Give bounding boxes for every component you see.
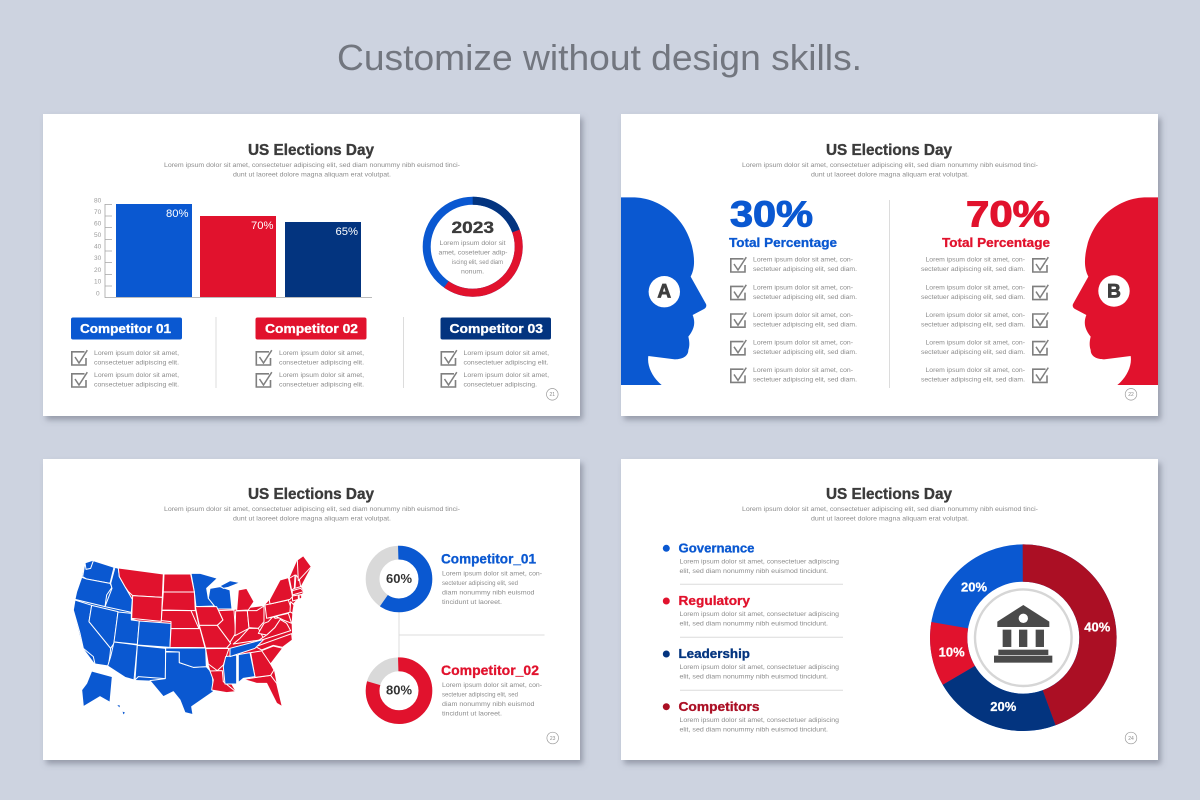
page number 24 [1125, 732, 1137, 744]
text: competitor 01: Lorem ipsum dolor sit amet, con- [442, 571, 542, 578]
competitor 02: Lorem ipsum dolor sit amet, [279, 372, 364, 379]
bar chart: 80 [94, 198, 102, 204]
list item: regulatory: Regulatory [678, 593, 751, 608]
page number 23: 23 [550, 736, 556, 742]
bar chart: 70 [94, 209, 102, 216]
competitor 01: consectetuer adipiscing elit. [94, 382, 179, 388]
checklist: left: sectetuer adipiscing elit, sed diam. [753, 321, 857, 328]
intro text: Lorem ipsum dolor sit amet, consectetuer adipiscing elit, sed diam nonummy nibh euismod tinci- [742, 162, 1038, 169]
checklist: left: Lorem ipsum dolor sit amet, con- [753, 284, 853, 291]
competitor 02: consectetuer adipiscing elit. [279, 382, 364, 388]
checklist: right: sectetuer adipiscing elit, sed diam. [921, 266, 1025, 273]
text: competitor 02 [441, 662, 542, 718]
text: competitor 02: sectetuer adipiscing elit, sed [442, 692, 518, 699]
title: US Elections Day [826, 486, 952, 503]
text: competitor 01: Competitor_01 [441, 550, 536, 566]
checklist: right: Lorem ipsum dolor sit amet, con- [926, 367, 1025, 374]
panel: head comparison slide [621, 114, 1158, 416]
checklist: right [921, 257, 1048, 384]
competitor 02: consectetuer adipiscing elit. [279, 360, 364, 366]
bar chart: 80% [166, 208, 189, 220]
page number 24: 24 [1128, 736, 1134, 742]
list item: regulatory: elit, sed diam nonummy nibh euismod tincidunt. [680, 620, 828, 628]
checklist: left: sectetuer adipiscing elit, sed diam. [753, 377, 857, 384]
checklist: left: sectetuer adipiscing elit, sed diam. [753, 266, 857, 273]
donut: 2023: 2023 [452, 218, 494, 237]
checklist: right: Lorem ipsum dolor sit amet, con- [926, 312, 1025, 319]
list item: leadership [663, 646, 839, 680]
list item: regulatory: Lorem ipsum dolor sit amet, consectetuer adipiscing [680, 611, 839, 618]
panel: bar chart slide [43, 114, 580, 416]
text: competitor 02: tincidunt ut laoreet. [442, 711, 502, 718]
stat: 30% [729, 194, 837, 250]
checklist: left: Lorem ipsum dolor sit amet, con- [753, 340, 853, 347]
text: competitor 02: Competitor_02 [441, 662, 539, 678]
donut chart: 20% [961, 580, 987, 595]
donut: competitor 02 80%: 80% [386, 684, 412, 698]
text: competitor 02: Lorem ipsum dolor sit amet, con- [442, 682, 542, 689]
text: competitor 01: sectetuer adipiscing elit, sed [442, 580, 518, 587]
stat: 70% [942, 194, 1050, 250]
competitor 01: Lorem ipsum dolor sit amet, [94, 372, 179, 379]
icon: blue head A: A [657, 282, 671, 302]
competitor 03 [440, 318, 551, 388]
competitor 01: consectetuer adipiscing elit. [94, 360, 179, 366]
title: US Elections Day [248, 142, 374, 159]
title: US Elections Day [248, 486, 374, 503]
checklist: right: sectetuer adipiscing elit, sed diam. [921, 377, 1025, 384]
list item: leadership: Lorem ipsum dolor sit amet, consectetuer adipiscing [680, 664, 839, 671]
text: competitor 02: diam nonummy nibh euismod [442, 701, 535, 708]
competitor 03: consectetuer adipiscing. [464, 382, 537, 388]
checklist: left: Lorem ipsum dolor sit amet, con- [753, 312, 853, 319]
intro text: Lorem ipsum dolor sit amet, consectetuer adipiscing elit, sed diam nonummy nibh euismod tinci- [164, 162, 460, 169]
bar chart: 20 [94, 267, 102, 274]
checklist: right: sectetuer adipiscing elit, sed diam. [921, 321, 1025, 328]
list item: regulatory [663, 593, 839, 628]
competitor 03: Lorem ipsum dolor sit amet, [464, 372, 549, 379]
competitor 02: Competitor 02 [265, 321, 358, 336]
text: competitor 01 [441, 550, 542, 606]
donut: 2023: nonum. [461, 268, 484, 276]
donut chart: 20% [990, 699, 1017, 714]
page number 23 [547, 732, 558, 744]
page number 22: 22 [1128, 392, 1134, 398]
list item: competitors [663, 699, 839, 734]
intro text [164, 162, 460, 178]
checklist: left: Lorem ipsum dolor sit amet, con- [753, 257, 853, 264]
donut: 2023: Lorem ipsum dolor sit [440, 240, 506, 247]
competitor 02 [256, 318, 366, 388]
intro text [164, 506, 460, 522]
list item: governance [663, 540, 839, 575]
title: US Elections Day [826, 142, 952, 159]
bar chart: 10 [94, 278, 102, 286]
list item: governance: Lorem ipsum dolor sit amet, consectetuer adipiscing [680, 558, 839, 565]
donut chart [939, 563, 1111, 714]
bar chart [94, 198, 372, 298]
list item: governance: elit, sed diam nonummy nibh euismod tincidunt. [680, 568, 828, 575]
main heading: Customize without design skills. [337, 37, 862, 78]
list item: competitors: elit, sed diam nonummy nibh euismod tincidunt. [680, 726, 828, 734]
icon: government building [994, 605, 1052, 663]
competitor 01: Lorem ipsum dolor sit amet, [94, 350, 179, 357]
donut: competitor 01 60%: 60% [386, 572, 412, 586]
bar chart: 30 [94, 255, 102, 262]
checklist: left: Lorem ipsum dolor sit amet, con- [753, 367, 853, 374]
stat: 70%: 70% [966, 194, 1050, 235]
checklist: right: Lorem ipsum dolor sit amet, con- [926, 257, 1025, 264]
panel: map slide [43, 459, 580, 760]
list item: competitors: Lorem ipsum dolor sit amet, consectetuer adipiscing [680, 717, 839, 724]
checklist: left: sectetuer adipiscing elit, sed diam. [753, 349, 857, 356]
donut: 2023: amet, cosetetuer adip- [438, 250, 508, 256]
bar chart: 40 [94, 244, 102, 250]
text: competitor 01: tincidunt ut laoreet. [442, 599, 502, 606]
stat: 70%: Total Percentage [942, 235, 1050, 250]
donut: competitor 02 80% [373, 664, 425, 717]
competitor 03: Competitor 03 [450, 321, 543, 336]
list item: competitors: Competitors [678, 699, 760, 714]
bar chart: 70% [251, 220, 274, 232]
page number 21: 21 [550, 392, 555, 398]
page number 22 [1125, 388, 1137, 400]
donut: 2023: iscing elit, sed diam [452, 259, 503, 266]
stat: 30%: 30% [730, 194, 813, 235]
icon: red head B: B [1107, 281, 1121, 302]
bar chart: 0 [96, 290, 100, 298]
intro text: dunt ut laoreet dolore magna aliquam erat volutpat. [233, 172, 391, 178]
competitor 03: Lorem ipsum dolor sit amet, [464, 350, 549, 357]
icon: blue head A [621, 197, 706, 385]
donut chart: 10% [939, 644, 965, 659]
intro text: Lorem ipsum dolor sit amet, consectetuer adipiscing elit, sed diam nonummy nibh euismod tinci- [164, 506, 460, 513]
competitor 03: consectetuer adipiscing elit. [464, 360, 549, 366]
bar chart: 60 [94, 220, 102, 228]
donut: 2023 [427, 201, 519, 293]
list item: leadership: Leadership [678, 646, 750, 661]
intro text [742, 506, 1038, 522]
checklist: left [731, 257, 857, 384]
competitor 01: Competitor 01 [80, 321, 171, 336]
checklist: right: sectetuer adipiscing elit, sed diam. [921, 294, 1025, 301]
icon: red head B [1073, 197, 1158, 385]
competitor 02: Lorem ipsum dolor sit amet, [279, 350, 364, 357]
list item: governance: Governance [678, 540, 754, 555]
US map [73, 556, 311, 715]
intro text [742, 162, 1038, 178]
intro text: Lorem ipsum dolor sit amet, consectetuer adipiscing elit, sed diam nonummy nibh euismod tinci- [742, 506, 1038, 513]
bar chart: 50 [94, 232, 102, 239]
donut: competitor 01 60% [373, 553, 425, 605]
checklist: right: Lorem ipsum dolor sit amet, con- [926, 340, 1025, 347]
intro text: dunt ut laoreet dolore magna aliquam erat volutpat. [233, 516, 391, 522]
checklist: right: sectetuer adipiscing elit, sed diam. [921, 349, 1025, 356]
checklist: left: sectetuer adipiscing elit, sed diam. [753, 294, 857, 301]
checklist: right: Lorem ipsum dolor sit amet, con- [926, 284, 1025, 291]
intro text: dunt ut laoreet dolore magna aliquam erat volutpat. [811, 172, 969, 178]
competitor 01 [71, 318, 182, 388]
bar chart: 65% [336, 226, 358, 238]
stat: 30%: Total Percentage [729, 235, 837, 250]
list item: leadership: elit, sed diam nonummy nibh euismod tincidunt. [680, 674, 828, 680]
panel: donut list slide [621, 459, 1158, 760]
text: competitor 01: diam nonummy nibh euismod [442, 590, 535, 597]
page number 21 [546, 388, 558, 400]
donut chart: 40% [1084, 619, 1111, 634]
intro text: dunt ut laoreet dolore magna aliquam erat volutpat. [811, 516, 969, 522]
